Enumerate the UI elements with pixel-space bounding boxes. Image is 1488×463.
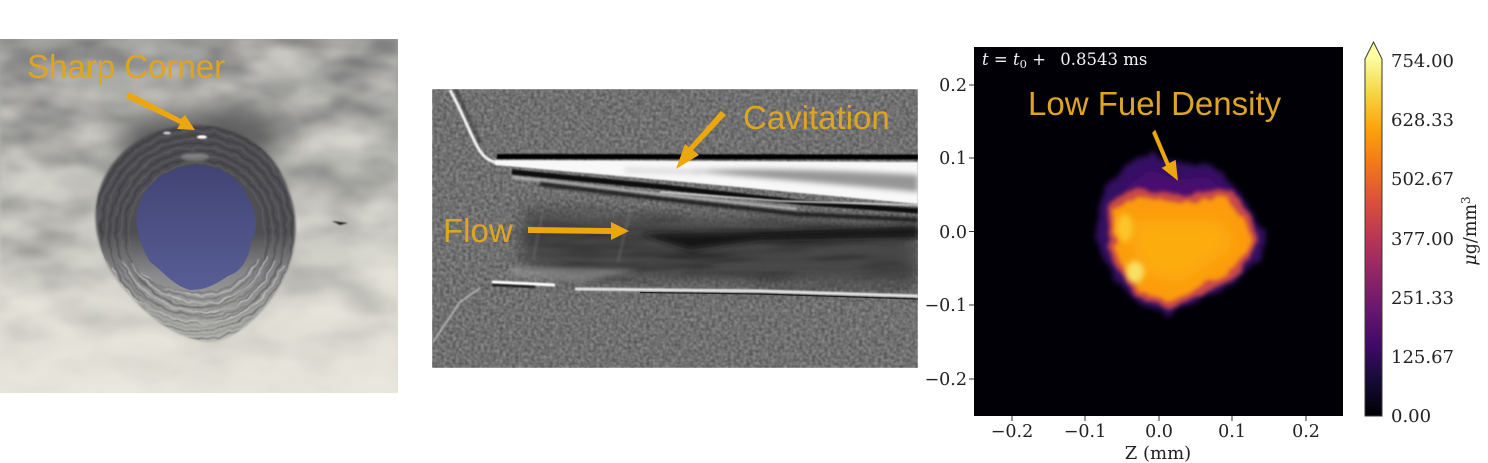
density blob — [1094, 153, 1266, 317]
lower wall line — [492, 282, 555, 285]
label: Flow: Flow — [443, 212, 513, 249]
arrow: to low density region — [1153, 131, 1177, 179]
label: Cavitation: Cavitation — [743, 99, 890, 136]
colorbar labels: 754.00 — [1391, 51, 1454, 72]
arrow: flow direction — [528, 222, 629, 240]
arrow: to sharp corner — [126, 92, 195, 130]
timestamp: + — [1027, 50, 1051, 69]
crater wall — [93, 125, 301, 342]
timestamp: 0.8543 ms — [1060, 50, 1147, 69]
label: Sharp Corner: Sharp Corner — [27, 48, 225, 85]
colorbar unit: 3 — [1459, 196, 1473, 204]
colorbar labels: 251.33 — [1391, 288, 1454, 309]
x axis labels: 0.2 — [1292, 422, 1320, 442]
colorbar labels: 0.00 — [1391, 406, 1431, 427]
y axis labels — [924, 76, 967, 390]
plot background — [974, 47, 1343, 416]
y axis labels: 0.0 — [939, 223, 967, 243]
upper black line — [497, 154, 918, 160]
y axis labels: 0.2 — [939, 76, 967, 96]
colorbar scale — [1365, 42, 1382, 416]
timestamp: 0 — [1020, 57, 1027, 71]
cavitation white wedge — [495, 160, 918, 204]
x axis labels: 0.0 — [1145, 422, 1173, 442]
colorbar labels: 125.67 — [1391, 347, 1454, 368]
colorbar labels — [1391, 51, 1454, 427]
timestamp: t = t — [982, 50, 1020, 69]
band below cavitation — [512, 177, 797, 209]
colorbar unit: μg/mm — [1461, 204, 1481, 266]
label: Low Fuel Density: Low Fuel Density — [1028, 85, 1282, 122]
chart: fuel density heat map — [924, 47, 1343, 463]
colorbar labels: 628.33 — [1391, 110, 1454, 131]
panel: nozzle hole surface — [0, 39, 398, 393]
upper wall white line — [450, 90, 498, 163]
axis tick marks — [969, 85, 1306, 421]
colorbar — [1365, 42, 1481, 427]
arrow: to cavitation — [676, 111, 726, 169]
y axis labels: 0.1 — [939, 149, 967, 169]
x axis labels — [991, 422, 1320, 442]
x axis labels: −0.1 — [1064, 422, 1106, 442]
x axis labels: −0.2 — [991, 422, 1033, 442]
blue hole — [137, 165, 256, 290]
x axis labels: 0.1 — [1218, 422, 1246, 442]
colorbar labels: 377.00 — [1391, 229, 1454, 250]
panel: cavitation image — [432, 89, 918, 368]
y axis labels: −0.2 — [924, 370, 967, 390]
colorbar labels: 502.67 — [1391, 169, 1454, 190]
y axis labels: −0.1 — [924, 296, 967, 316]
